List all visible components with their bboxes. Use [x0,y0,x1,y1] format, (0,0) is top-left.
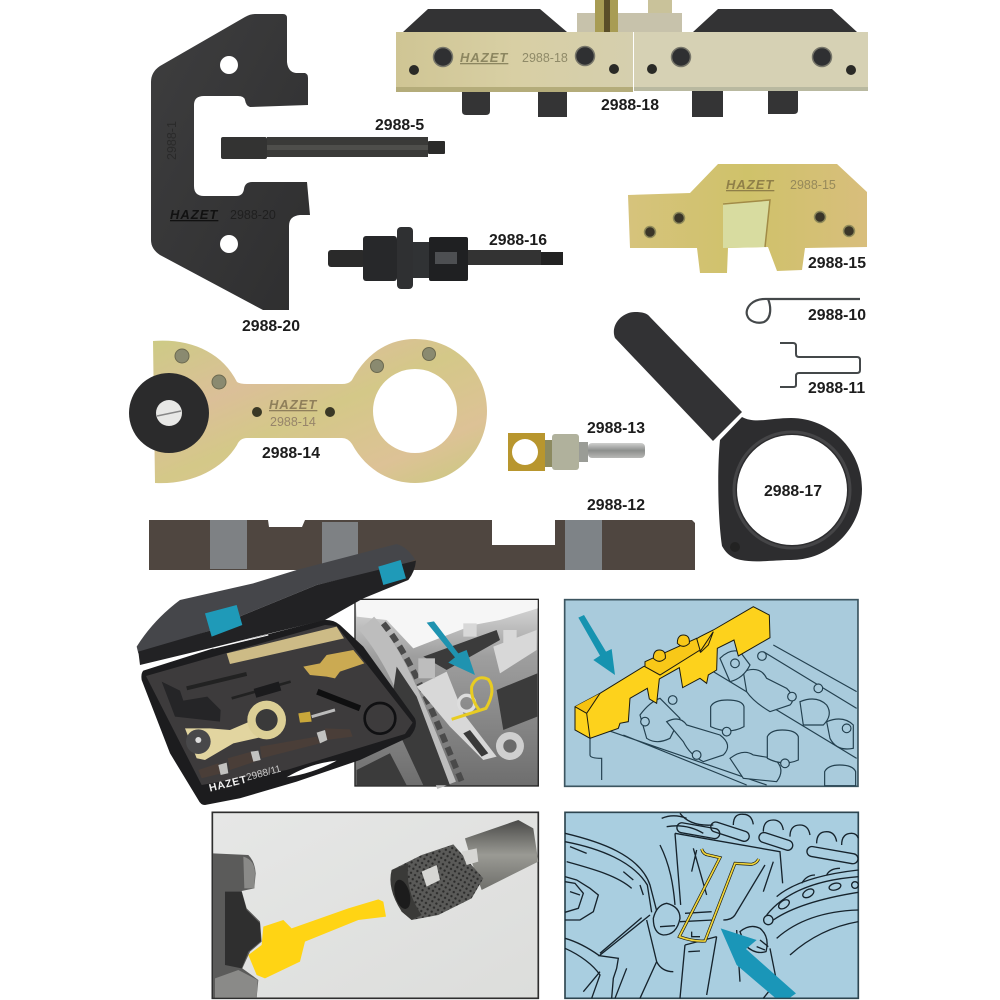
left half [396,32,633,92]
case lid [137,544,416,665]
tool: 2988-16 threaded puller [328,227,563,289]
diagram panel: wire hook on timing chain [565,812,859,998]
label: 2988-17: 2988-17 [764,483,822,500]
tool: 2988-14 gold locking wrench [129,339,487,483]
yellow wire hook [679,849,759,941]
steel coupling [390,820,538,920]
tool: 2988-14 gold locking wrench: HAZET [269,397,317,412]
yellow plug [248,899,386,978]
label: 2988-13: 2988-13 [587,420,645,437]
tool: 2988-20 black locating plate [151,14,310,310]
photo panel: engine with wire pin [355,599,538,786]
handle opening [287,761,337,777]
tool: 2988-15 gold bracket: HAZET [726,177,774,192]
tools in foam [162,627,395,778]
case base [141,620,416,805]
dark engine recesses [357,630,537,785]
photo panel: air connector coupling [212,812,538,998]
tool: 2988-18 camshaft alignment bar: 2988-18 [522,51,568,65]
tool: 2988-17 black spanner ring [614,312,862,561]
tool: 2988-12 alignment rail [149,520,695,570]
rocker arm [417,672,497,760]
tool: 2988-10 wire pin [747,299,860,323]
diagram panel: alignment bar on camshafts [565,600,858,786]
sprocket chain [367,623,447,785]
product photo: open tool case [137,544,416,805]
tool: 2988-20 black locating plate: 2988-1 [165,121,179,160]
label: 2988-12: 2988-12 [587,497,645,514]
tool: 2988-15 gold bracket [628,164,867,273]
chain and engine line art [565,813,859,998]
label: 2988-16: 2988-16 [489,232,547,249]
right half [634,32,868,91]
foam insert [146,625,413,785]
tool: 2988-20 black locating plate: 2988-20 [230,208,276,222]
tool: 2988-11 wire hook [780,343,860,387]
label: 2988-20: 2988-20 [242,318,300,335]
label: 2988-18: 2988-18 [601,97,659,114]
label: 2988-14: 2988-14 [262,445,320,462]
tool: 2988-13 air connector [508,433,645,471]
label: 2988-10: 2988-10 [808,307,866,324]
teal arrow [578,615,615,675]
tool: 2988-15 gold bracket: 2988-15 [790,178,836,192]
tool: 2988-18 camshaft alignment bar: HAZET [460,50,508,65]
tool: 2988-18 camshaft alignment bar [396,0,868,117]
tool: 2988-14 gold locking wrench: 2988-14 [270,415,316,429]
teeth [462,91,798,117]
yellow wire loop [452,678,492,719]
knurled black wheel [129,373,209,453]
teal arrow [427,621,475,675]
centre clamp and bolts [577,0,682,32]
label: 2988-11: 2988-11 [808,380,865,397]
tool: 2988-20 black locating plate: HAZET [170,207,218,222]
dark engine part [213,853,262,998]
label: 2988-15: 2988-15 [808,255,866,272]
case logo and number: HAZET [208,774,248,795]
yellow alignment bar [575,607,770,738]
black top blocks [403,9,857,32]
label: 2988-5: 2988-5 [375,117,424,134]
tool: 2988-5 pin [221,137,445,159]
case part number: 2988/11 [245,764,283,784]
teal arrow [721,928,796,998]
camshaft line art [590,645,857,786]
